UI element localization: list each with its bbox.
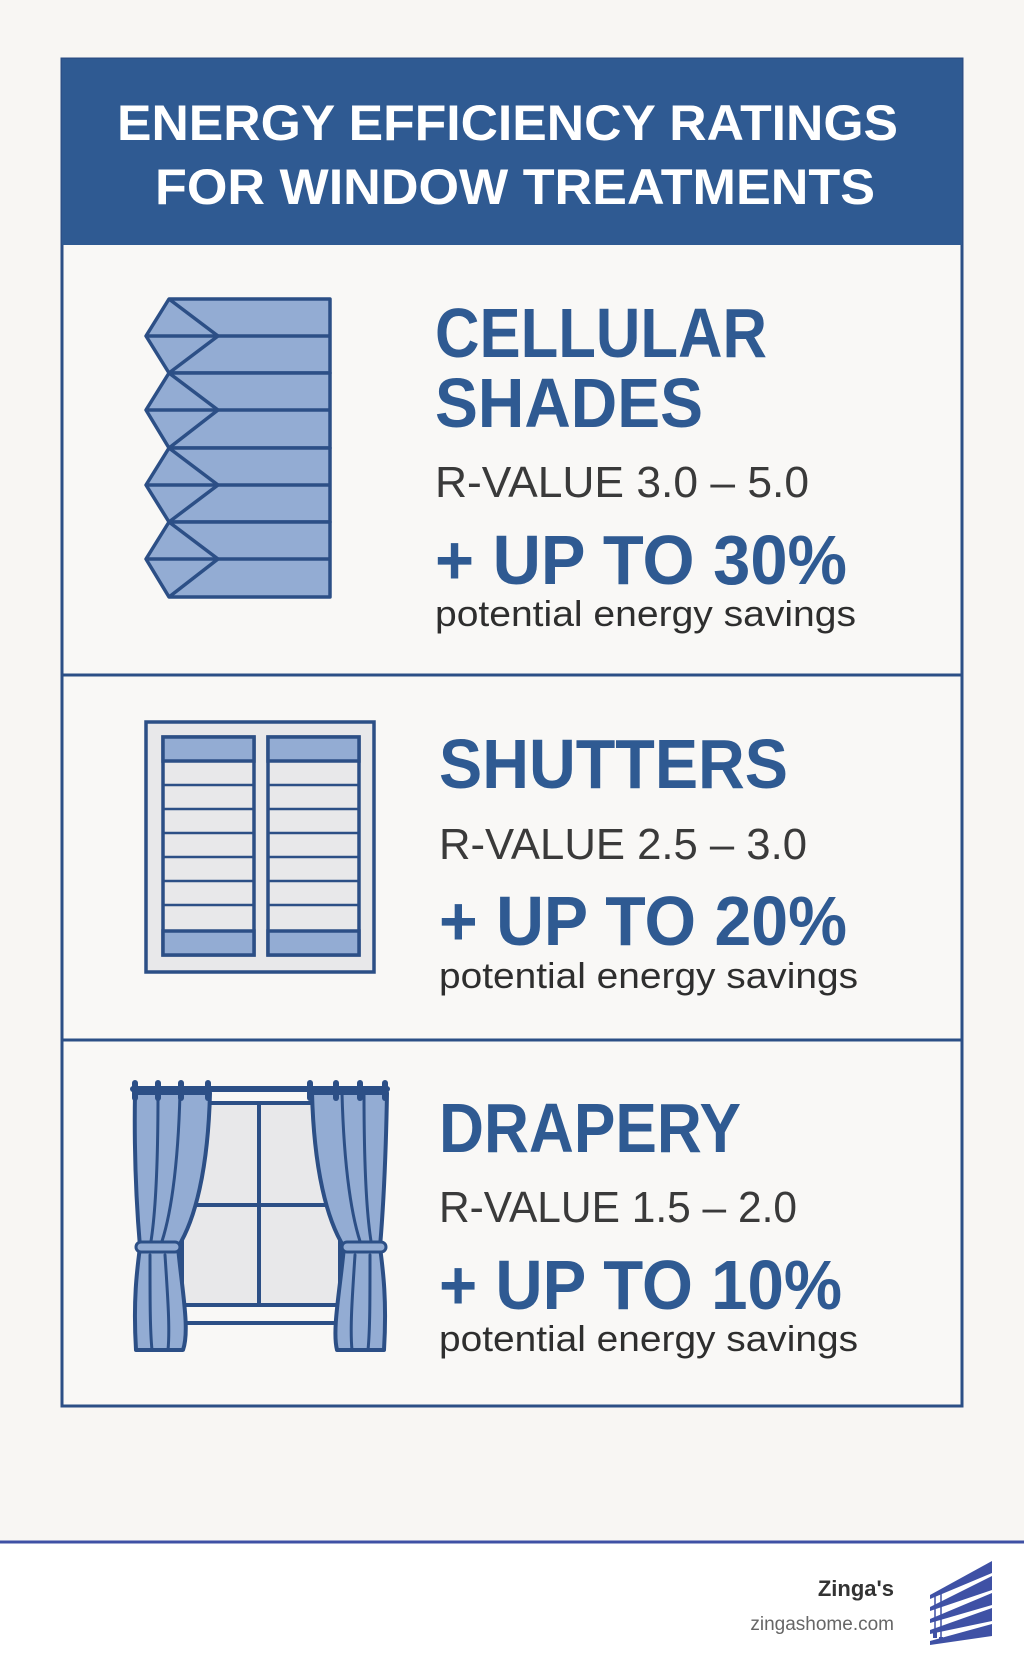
heading: shutters: SHUTTERS	[439, 725, 788, 803]
header band	[62, 59, 962, 245]
icon: drapery	[133, 1083, 387, 1350]
heading: drapery: DRAPERY	[439, 1089, 741, 1167]
icon: blinds logo	[930, 1561, 992, 1645]
heading: cellular shades: CELLULAR	[435, 294, 767, 372]
text: caption: potential energy savings	[435, 593, 856, 634]
text: brand: Zinga's	[818, 1576, 894, 1601]
heading: cellular shades	[435, 294, 767, 442]
panel: main card	[62, 59, 962, 1406]
text: caption: potential energy savings	[439, 955, 858, 996]
footer	[0, 1542, 1024, 1666]
text: savings: + UP TO 30%	[435, 521, 847, 599]
text: r-value: R-VALUE 3.0 – 5.0	[435, 458, 809, 507]
panel: shutters	[146, 722, 858, 996]
title: ENERGY EFFICIENCY RATINGS	[117, 95, 898, 151]
panel: drapery	[133, 1083, 858, 1359]
text: savings: + UP TO 20%	[439, 882, 847, 960]
text: r-value: R-VALUE 1.5 – 2.0	[439, 1183, 797, 1232]
panel: cellular shades	[146, 294, 856, 634]
text: savings: + UP TO 10%	[439, 1246, 842, 1324]
icon: shutters	[146, 722, 374, 972]
title: FOR WINDOW TREATMENTS	[155, 159, 875, 215]
text: caption: potential energy savings	[439, 1318, 858, 1359]
text: url: zingashome.com	[750, 1614, 894, 1635]
text: r-value: R-VALUE 2.5 – 3.0	[439, 820, 807, 869]
icon: cellular shades	[146, 299, 330, 597]
title	[117, 95, 898, 215]
heading: cellular shades: SHADES	[435, 364, 703, 442]
